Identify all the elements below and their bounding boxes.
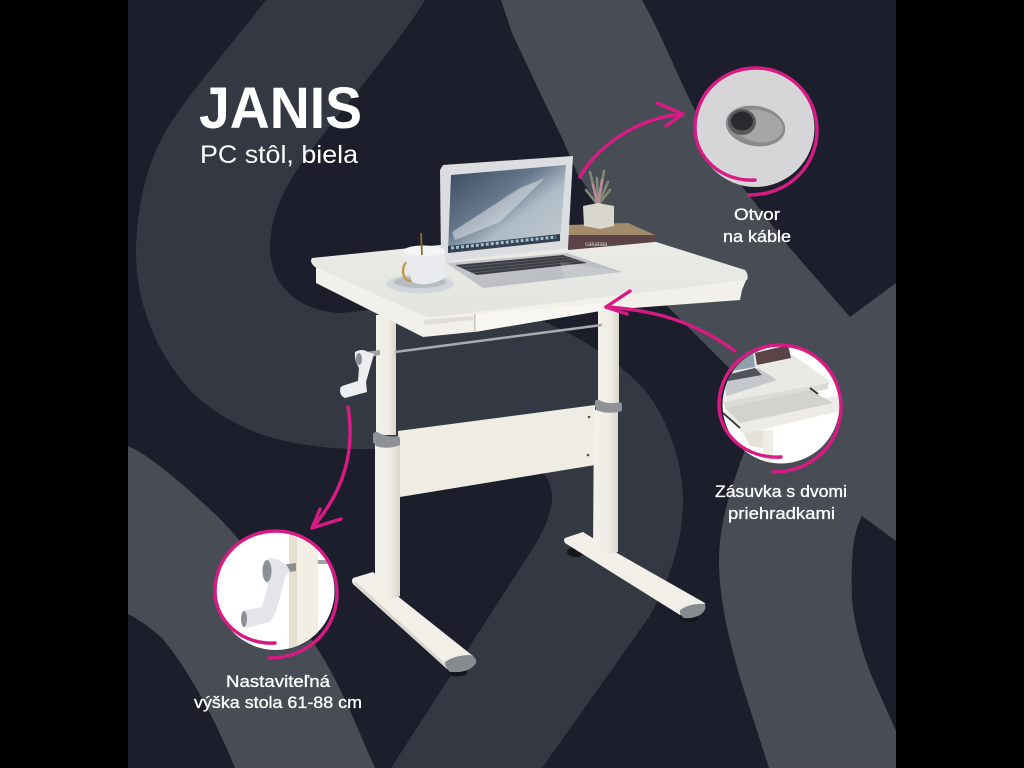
left foot xyxy=(352,572,476,676)
label: drawer: Zásuvka s dvomi xyxy=(715,483,847,501)
label: height: výška stola 61-88 cm xyxy=(194,694,362,712)
background panel xyxy=(128,0,896,768)
arrow: to cable hole xyxy=(580,103,683,177)
label: cable hole: na káble xyxy=(723,228,791,246)
crank handle xyxy=(340,350,380,398)
crossbar xyxy=(398,405,595,497)
left leg xyxy=(373,315,400,598)
plant xyxy=(583,171,614,229)
tabletop xyxy=(311,241,748,337)
detail: drawer xyxy=(715,345,841,472)
label: drawer: priehradkami xyxy=(728,505,835,523)
subtitle: PC stôl, biela xyxy=(200,141,358,169)
rear foot pads xyxy=(356,547,585,590)
detail: crank xyxy=(215,525,337,658)
infographic canvas xyxy=(128,0,896,768)
right foot xyxy=(564,532,705,622)
book: cakatala xyxy=(585,242,608,248)
label: height xyxy=(194,673,362,712)
label: drawer xyxy=(715,483,847,523)
label: cable hole: Otvor xyxy=(734,206,781,224)
right leg xyxy=(593,305,622,554)
book xyxy=(568,223,655,250)
rod xyxy=(395,325,602,352)
arrow: to drawer xyxy=(606,291,735,351)
detail: cable hole xyxy=(695,68,817,195)
title: JANIS xyxy=(199,76,362,141)
laptop xyxy=(440,156,622,288)
arrow: to crank detail xyxy=(312,407,350,528)
label: height: Nastaviteľná xyxy=(226,673,331,691)
coffee cup xyxy=(386,233,454,294)
desk illustration xyxy=(311,156,748,676)
label: cable hole xyxy=(723,206,791,246)
